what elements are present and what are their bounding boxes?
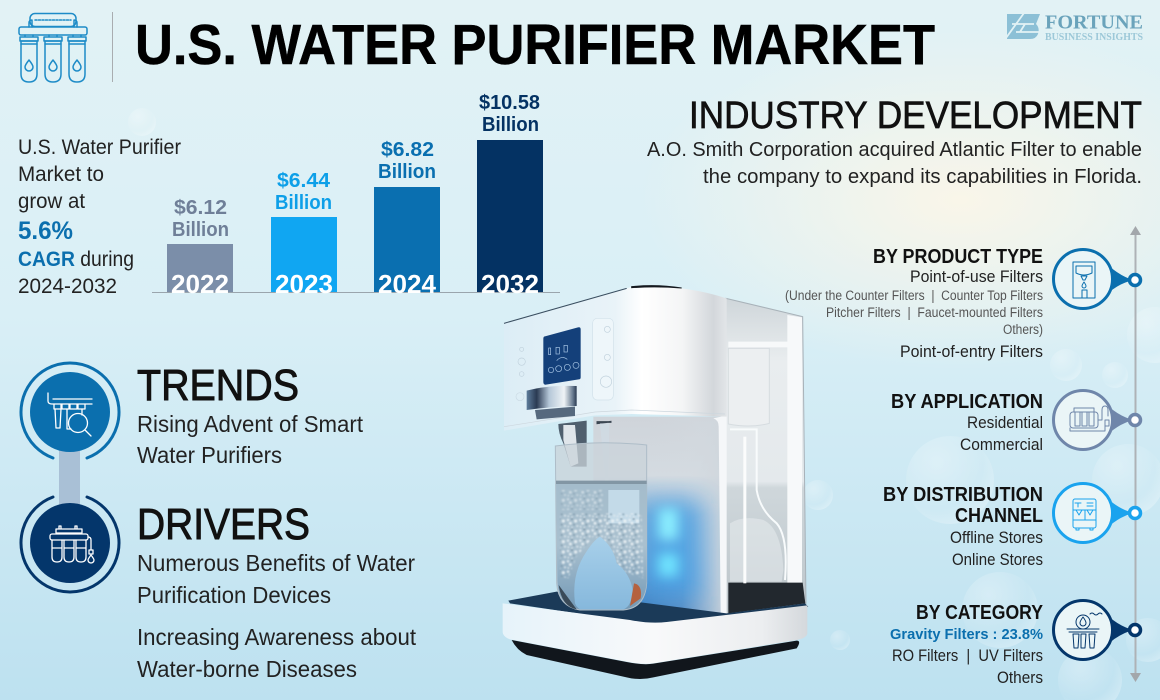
segment: by distribution channel xyxy=(883,484,1043,569)
segment: by category: Gravity Filters : 23.8% xyxy=(890,627,1043,643)
segment: by product type: Point-of-entry Filters xyxy=(900,343,1043,361)
segment: by product type: Point-of-use Filters xyxy=(910,268,1043,286)
bar chart: market size: 2032 xyxy=(481,269,539,299)
text: CAGR summary: U.S. Water Purifier xyxy=(18,136,181,159)
bar chart: market size: Billion xyxy=(275,191,332,214)
faucet xyxy=(558,421,587,467)
text: CAGR summary: Market to xyxy=(18,163,104,186)
icon: drivers xyxy=(21,497,119,592)
glass xyxy=(555,443,647,610)
text: CAGR summary: 2024-2032 xyxy=(18,275,117,298)
logo: Fortune Business Insights: BUSINESS INSIGHTS xyxy=(1045,32,1143,43)
bar chart: market size: 2023 xyxy=(275,269,333,299)
timeline axis xyxy=(1130,226,1141,682)
icon: distribution channel xyxy=(1054,484,1140,542)
text: drivers: Increasing Awareness about xyxy=(137,624,417,650)
icon: category xyxy=(1054,600,1140,660)
bar chart: market size: Billion xyxy=(172,218,229,241)
chrome head xyxy=(527,386,577,410)
body xyxy=(504,286,727,431)
text: trends xyxy=(137,361,364,468)
icon: product type xyxy=(1054,250,1140,308)
segment: by application: Commercial xyxy=(960,436,1043,454)
bar chart: market size: $6.82 xyxy=(381,138,434,161)
segment: by product type xyxy=(785,246,1043,361)
connector between trends and drivers xyxy=(59,450,80,506)
icon: trends xyxy=(21,363,119,458)
text: CAGR summary: 5.6% xyxy=(18,217,73,245)
segment: by application: BY APPLICATION xyxy=(891,391,1043,413)
text: drivers xyxy=(137,500,417,682)
text: drivers: DRIVERS xyxy=(137,500,310,549)
segment: by distribution channel: Offline Stores xyxy=(950,529,1043,547)
text: trends: TRENDS xyxy=(137,361,299,410)
text: CAGR summary: CAGR during xyxy=(18,248,134,271)
text: trends: Rising Advent of Smart xyxy=(137,411,364,437)
segment: by application xyxy=(891,391,1043,454)
bar chart: market size xyxy=(152,91,560,299)
screen xyxy=(543,327,581,385)
bar chart: market size: 2024 xyxy=(378,269,437,299)
segment: by category: RO Filters | UV Filters xyxy=(892,647,1043,665)
bar chart: market size: Billion xyxy=(482,113,539,136)
wall xyxy=(593,417,725,613)
segment: by product type: (Under the Counter Filters | Counter Top Filters xyxy=(785,288,1043,303)
text: industry development detail xyxy=(647,139,1142,188)
segment: by category: Others xyxy=(997,669,1043,687)
panel buttons xyxy=(593,318,613,400)
text: industry development detail: the company to expand its capabilities in Florida. xyxy=(703,166,1142,188)
product image: water purifier xyxy=(503,286,808,679)
segment: by product type: Others) xyxy=(1003,322,1043,337)
logo: Fortune Business Insights: FORTUNE xyxy=(1045,12,1143,34)
bar chart: market size: $6.44 xyxy=(277,169,331,192)
segment: by distribution channel: CHANNEL xyxy=(955,505,1043,527)
segment: by category xyxy=(890,602,1044,687)
segment: by distribution channel: BY DISTRIBUTION xyxy=(883,484,1043,506)
segment: by product type: BY PRODUCT TYPE xyxy=(873,246,1043,268)
text: drivers: Purification Devices xyxy=(137,582,331,608)
title: U.S. WATER PURIFIER MARKET xyxy=(135,13,935,77)
icon: application xyxy=(1054,390,1140,450)
tray xyxy=(508,592,808,623)
bar chart: market size: 2022 xyxy=(171,269,229,299)
text: trends: Water Purifiers xyxy=(137,442,282,468)
segment: by category: BY CATEGORY xyxy=(916,602,1044,624)
text: CAGR summary xyxy=(18,136,181,298)
text: drivers: Numerous Benefits of Water xyxy=(137,550,415,576)
text: industry development detail: A.O. Smith Corporation acquired Atlantic Filter to enable xyxy=(647,139,1142,161)
icon: water filter system xyxy=(19,14,87,82)
text: CAGR summary: grow at xyxy=(18,190,85,213)
tank xyxy=(726,298,806,614)
text: drivers: Water-borne Diseases xyxy=(137,656,357,682)
logo: Fortune Business Insights xyxy=(1006,12,1143,43)
bar chart: market size: $6.12 xyxy=(174,196,227,219)
bar chart: market size: $10.58 xyxy=(479,91,540,114)
base xyxy=(503,603,807,664)
segment: by application: Residential xyxy=(967,414,1043,432)
segment: by product type: Pitcher Filters | Faucet-mounted Filters xyxy=(826,305,1043,320)
segment: by distribution channel: Online Stores xyxy=(952,551,1043,569)
bar chart: market size: Billion xyxy=(378,160,436,183)
